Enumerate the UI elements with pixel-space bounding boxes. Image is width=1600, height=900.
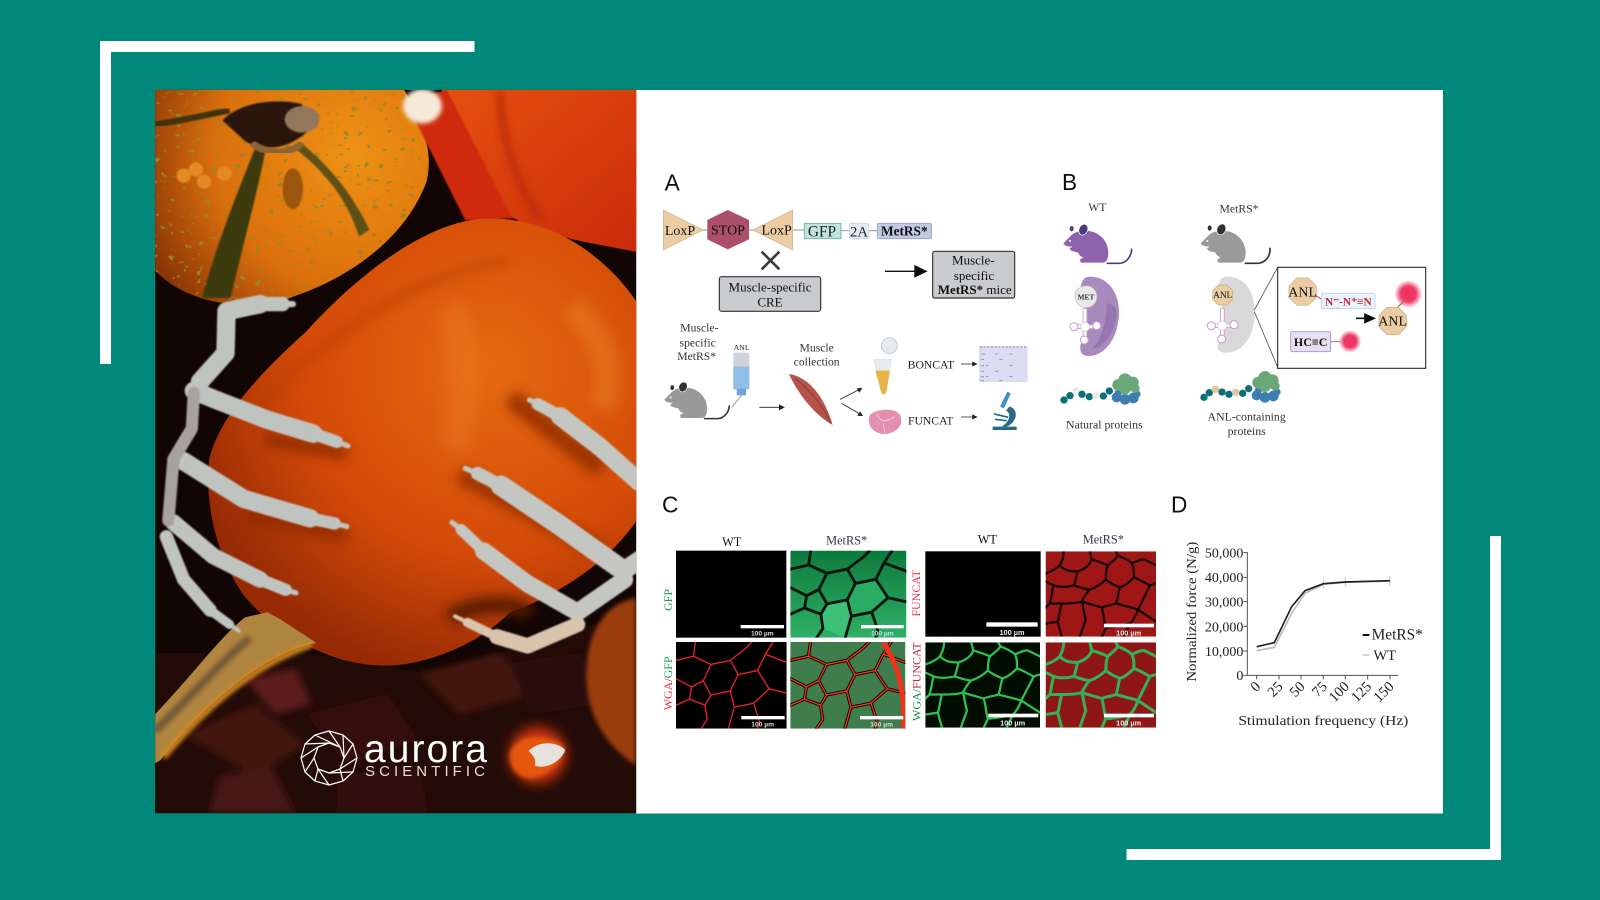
wordmark subtitle: SCIENTIFIC	[365, 763, 485, 780]
x tick labels: 100	[1326, 679, 1353, 706]
label WT: WT	[1088, 201, 1106, 214]
genetic construct	[663, 210, 932, 250]
x tick labels: 75	[1309, 679, 1331, 701]
legend: MetRS*	[1372, 627, 1423, 644]
candle	[406, 90, 512, 220]
label: muscle collection: collection	[794, 356, 840, 369]
row labels	[661, 569, 924, 721]
micrograph: WT GFP	[676, 551, 786, 638]
micrograph: WT GFP: 100 µm	[751, 631, 774, 638]
box: muscle-specific CRE: CRE	[757, 295, 783, 310]
logo: Aurora Scientific	[301, 728, 487, 785]
icon: purple mouse	[1063, 223, 1132, 263]
label: muscle-specific MetRS: Muscle-	[680, 322, 719, 335]
row labels: FUNCAT	[909, 569, 923, 617]
y axis title: Normalized force (N/g)	[1185, 541, 1200, 682]
icon: natural protein	[1060, 373, 1141, 405]
y tick labels: 10,000	[1205, 645, 1243, 660]
skeleton left hand	[166, 304, 348, 631]
x tick labels	[1248, 679, 1397, 706]
micrograph: WT FUNCAT: 100 µm	[999, 628, 1025, 637]
x tick labels: 25	[1265, 679, 1286, 701]
heading D: D	[1171, 492, 1187, 518]
icon: western blot gel	[979, 346, 1028, 382]
stem	[222, 101, 306, 148]
arrow BONCAT	[961, 362, 977, 366]
wordmark: aurora	[364, 728, 487, 771]
label: muscle-specific MetRS: specific	[680, 337, 716, 350]
arrow	[759, 405, 784, 410]
error bars	[1323, 576, 1390, 589]
panel D: force-frequency chart	[1171, 492, 1423, 729]
y tick labels: 50,000	[1205, 546, 1243, 561]
micrograph: MetRS WGA/GFP	[790, 642, 905, 729]
callout: click chemistry: ANL	[1378, 315, 1407, 330]
label: ANL-containing proteins: ANL-containing	[1208, 410, 1286, 424]
axes	[1243, 552, 1398, 679]
micrograph: MetRS WGA/FUNCAT	[1046, 642, 1156, 728]
micrograph: MetRS WGA/GFP: 100 µm	[870, 722, 893, 729]
x tick labels: 50	[1287, 679, 1308, 701]
x axis title: Stimulation frequency (Hz)	[1238, 714, 1409, 729]
genetic construct: GFP	[808, 223, 836, 240]
callout: click chemistry: N⁻-N⁺≡N	[1325, 297, 1373, 309]
pumpkin stalk	[155, 612, 316, 763]
row labels: WGA/FUNCAT	[910, 642, 924, 721]
column labels: MetRS*	[826, 533, 867, 547]
callout: click chemistry: ANL	[1288, 285, 1317, 300]
warty orange pumpkin	[155, 90, 429, 305]
column labels: WT	[978, 532, 997, 546]
y tick labels: 0	[1236, 669, 1243, 684]
legend	[1363, 627, 1423, 664]
panel: white figure card	[636, 90, 1443, 814]
photo: pumpkins with skeleton hands	[155, 89, 641, 813]
callout: click chemistry	[1278, 267, 1426, 368]
label: muscle-specific MetRS: MetRS*	[677, 350, 716, 363]
box: MetRS mice: Muscle-	[952, 253, 995, 268]
y tick labels: 20,000	[1205, 620, 1243, 635]
label BONCAT: BONCAT	[908, 358, 954, 371]
ribosome: WT with MET	[1070, 277, 1119, 356]
micrograph: MetRS GFP	[790, 551, 906, 638]
heading B: B	[1062, 169, 1077, 195]
micrograph: WT FUNCAT	[925, 551, 1041, 637]
micrograph: WT WGA/GFP	[676, 642, 787, 729]
genetic construct: MetRS*	[881, 223, 928, 238]
row labels: WGA/GFP	[661, 656, 675, 710]
label: muscle collection: Muscle	[800, 342, 834, 355]
heading C: C	[662, 492, 678, 518]
y tick labels	[1205, 546, 1243, 684]
column labels	[722, 532, 1124, 549]
ribosome: MetRS with ANL	[1207, 277, 1255, 353]
panel A: experimental design	[663, 170, 1028, 434]
heading A: A	[665, 170, 681, 196]
x tick labels: 150	[1371, 679, 1397, 706]
x tick labels: 125	[1348, 679, 1375, 706]
ribosome: MetRS with ANL: ANL	[1213, 291, 1233, 301]
box: muscle-specific CRE: Muscle-specific	[729, 280, 812, 295]
label: ANL-containing proteins: proteins	[1228, 424, 1266, 438]
box: MetRS mice: specific	[954, 268, 994, 283]
y tick labels: 30,000	[1205, 596, 1243, 611]
y tick labels: 40,000	[1205, 571, 1243, 586]
lower right pumpkin	[586, 598, 636, 765]
icon: muscle	[789, 374, 833, 425]
icon: sample tube	[874, 338, 897, 394]
box: MetRS mice: MetRS* mice	[938, 282, 1012, 297]
column labels: MetRS*	[1083, 532, 1124, 546]
micrograph: MetRS GFP: 100 µm	[871, 631, 894, 638]
icon: microscope	[993, 392, 1017, 430]
corner bracket: bottom right	[1126, 536, 1501, 860]
icon: ANL water bottle: ANL	[734, 343, 750, 352]
genetic construct: LoxP	[762, 223, 792, 238]
micrograph: MetRS WGA/FUNCAT: 100 µm	[1116, 718, 1142, 727]
genetic construct: 2A	[850, 224, 868, 240]
panel C: microscopy	[661, 492, 1156, 729]
arrows: split	[840, 388, 862, 416]
line: MetRS	[1257, 581, 1390, 647]
corner bracket: top left	[100, 41, 474, 364]
micrograph: MetRS FUNCAT: 100 µm	[1116, 629, 1142, 638]
row labels: GFP	[661, 589, 675, 611]
box: MetRS mice	[933, 251, 1015, 298]
arrow FUNCAT	[961, 415, 977, 419]
icon: gray mouse	[664, 381, 729, 419]
callout: click chemistry: HC≡C	[1294, 335, 1327, 349]
icon: ANL-containing protein	[1200, 371, 1281, 403]
genetic construct: LoxP	[665, 224, 695, 239]
icon: muscle tissue section	[869, 410, 901, 434]
box: muscle-specific CRE	[719, 277, 821, 311]
micrograph: MetRS FUNCAT	[1046, 551, 1156, 638]
micrograph: WT WGA/FUNCAT: 100 µm	[1000, 718, 1026, 727]
genetic construct: STOP	[711, 223, 745, 238]
ribosome: WT with MET: MET	[1078, 292, 1094, 301]
label MetRS*: MetRS*	[1220, 202, 1259, 215]
skeleton right hand	[452, 400, 641, 646]
cross symbol	[762, 252, 779, 269]
micrograph: WT WGA/FUNCAT	[925, 642, 1040, 728]
label FUNCAT: FUNCAT	[908, 414, 953, 427]
large orange pumpkin	[208, 218, 637, 666]
top right red pumpkin	[442, 90, 637, 252]
callout lines	[1254, 267, 1278, 367]
label: natural proteins: Natural proteins	[1066, 417, 1143, 431]
legend: WT	[1373, 648, 1396, 664]
icon: ANL water bottle	[732, 343, 750, 407]
x tick labels: 0	[1248, 679, 1264, 695]
micrograph: WT WGA/GFP: 100 µm	[751, 722, 774, 729]
icon: gray mouse	[1201, 222, 1270, 263]
logo mark	[301, 731, 357, 785]
candle glow	[509, 727, 566, 784]
line: WT	[1257, 581, 1390, 651]
column labels: WT	[722, 535, 742, 549]
arrow to mice box	[885, 266, 926, 277]
panel B: labelling mechanism	[1060, 169, 1426, 438]
